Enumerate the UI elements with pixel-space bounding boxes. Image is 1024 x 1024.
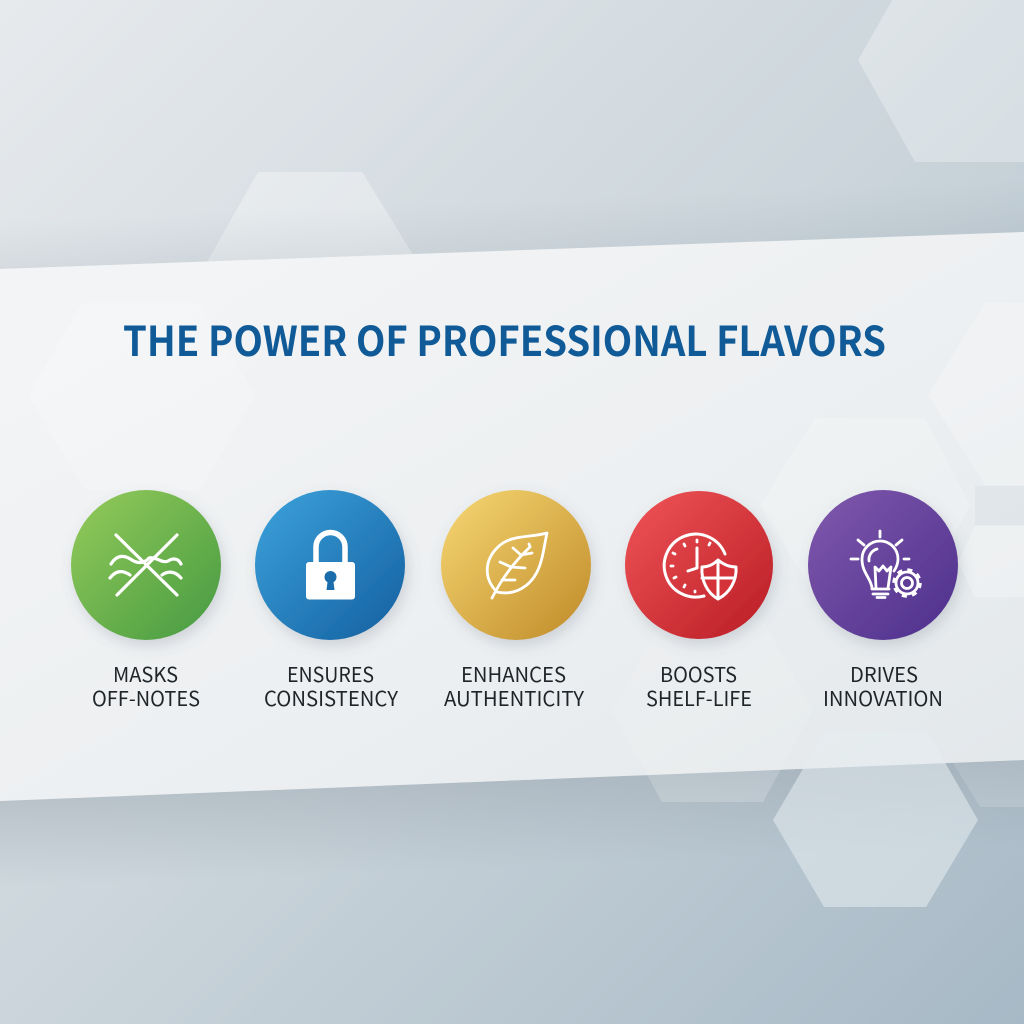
- yellow circle: [441, 490, 591, 640]
- item: masks off-notes: [71, 490, 221, 712]
- label: CONSISTENCY: [264, 682, 398, 712]
- blue circle: [255, 490, 405, 640]
- label: OFF-NOTES: [92, 682, 200, 712]
- item: ensures consistency: [255, 490, 405, 712]
- icon: crossed-out waves: [110, 535, 181, 595]
- label: SHELF-LIFE: [646, 682, 752, 712]
- icon: clock and shield: [664, 534, 736, 599]
- band hexagons: [28, 303, 1024, 802]
- item: enhances authenticity: [441, 490, 591, 712]
- item: drives innovation: [808, 490, 958, 712]
- label: DRIVES: [850, 658, 918, 688]
- title: THE POWER OF PROFESSIONAL FLAVORS: [123, 308, 886, 368]
- label: MASKS: [113, 658, 178, 688]
- label: INNOVATION: [823, 682, 943, 712]
- white diagonal band: [0, 232, 1024, 801]
- red circle: [625, 491, 773, 639]
- large lower hexagon: [773, 733, 978, 907]
- item: boosts shelf-life: [625, 491, 773, 712]
- icon: padlock: [306, 532, 355, 600]
- label: BOOSTS: [660, 658, 737, 688]
- green circle: [71, 490, 221, 640]
- icon: light bulb and gear: [851, 531, 920, 598]
- label: ENHANCES: [461, 658, 566, 688]
- band shadow: [0, 170, 1024, 921]
- label: AUTHENTICITY: [444, 682, 584, 712]
- icon: leaf: [487, 533, 547, 598]
- purple circle: [808, 490, 958, 640]
- background hexagons: [207, 0, 1024, 807]
- label: ENSURES: [287, 658, 374, 688]
